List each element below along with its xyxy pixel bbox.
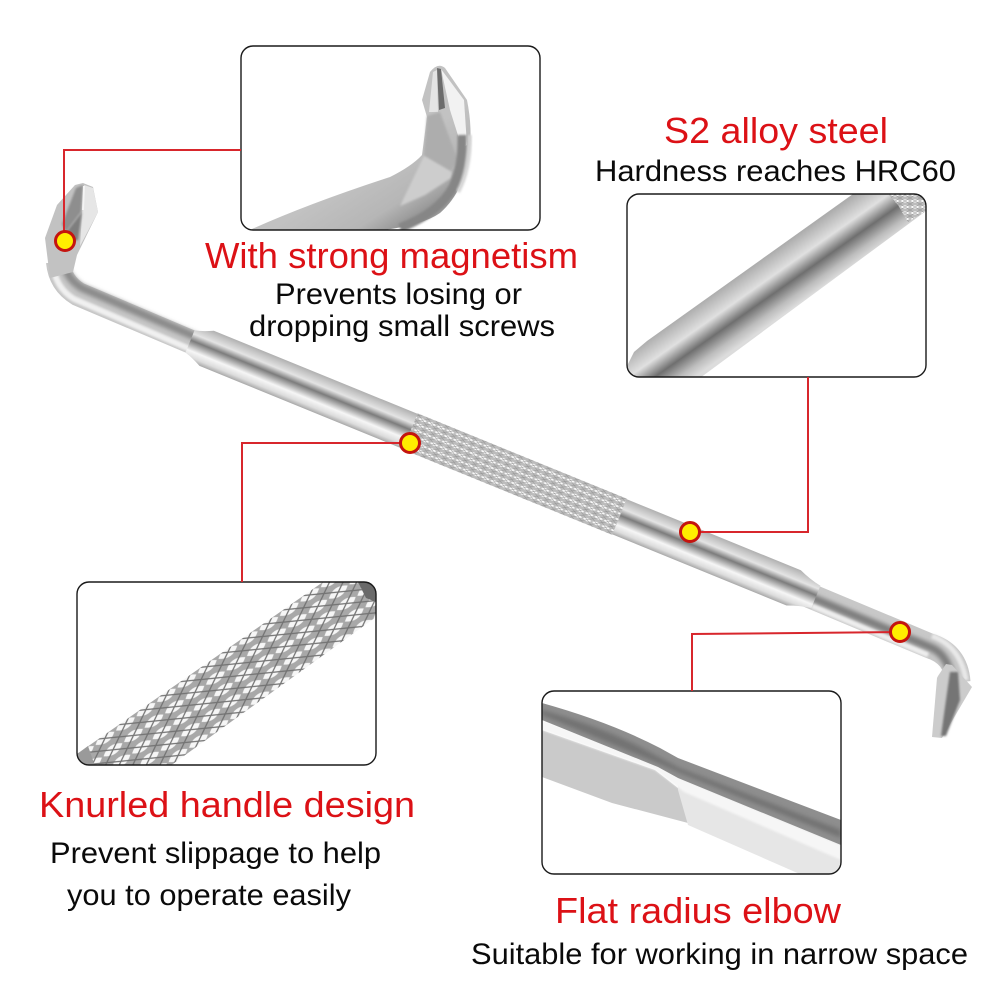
marker: tip [56, 232, 74, 250]
panel: magnetic tip close-up [241, 46, 540, 232]
marker: knurl [400, 434, 420, 452]
heading: S2 alloy steel: S2 alloy steel [664, 110, 888, 151]
heading: Flat radius elbow: Flat radius elbow [555, 890, 842, 931]
text: prevents losing [249, 278, 555, 343]
text: narrow space: Suitable for working in narrow space [471, 938, 968, 971]
tool: double-ended offset screwdriver [45, 183, 972, 738]
text: prevents losing: Prevents losing or [275, 278, 522, 311]
panel: knurled handle close-up [77, 582, 376, 766]
knurl edge [888, 194, 926, 222]
leader line: flat elbow [692, 632, 899, 691]
right neck and bend [808, 595, 966, 682]
heading: With strong magnetism: With strong magnetism [205, 235, 578, 276]
text: prevents losing: dropping small screws [249, 310, 555, 343]
text: hardness: Hardness reaches HRC60 [595, 155, 956, 188]
text: prevent slippage: you to operate easily [67, 879, 351, 912]
leader line: alloy steel [690, 377, 808, 532]
knurled grip [403, 413, 627, 535]
heading: Knurled handle design: Knurled handle design [39, 784, 415, 825]
panel: flat elbow close-up [542, 691, 841, 875]
left tip blade [45, 183, 98, 278]
leader line: magnetism [64, 150, 241, 241]
marker: shaft [680, 522, 700, 542]
leader line: knurled handle [242, 443, 410, 582]
text: prevent slippage [50, 837, 381, 912]
text: prevent slippage: Prevent slippage to help [50, 837, 381, 870]
right tip blade [932, 664, 972, 738]
left neck and bend [53, 262, 196, 350]
main handle [183, 323, 823, 615]
panel: S2 steel shaft close-up [627, 194, 926, 378]
marker: elbow [890, 622, 910, 642]
